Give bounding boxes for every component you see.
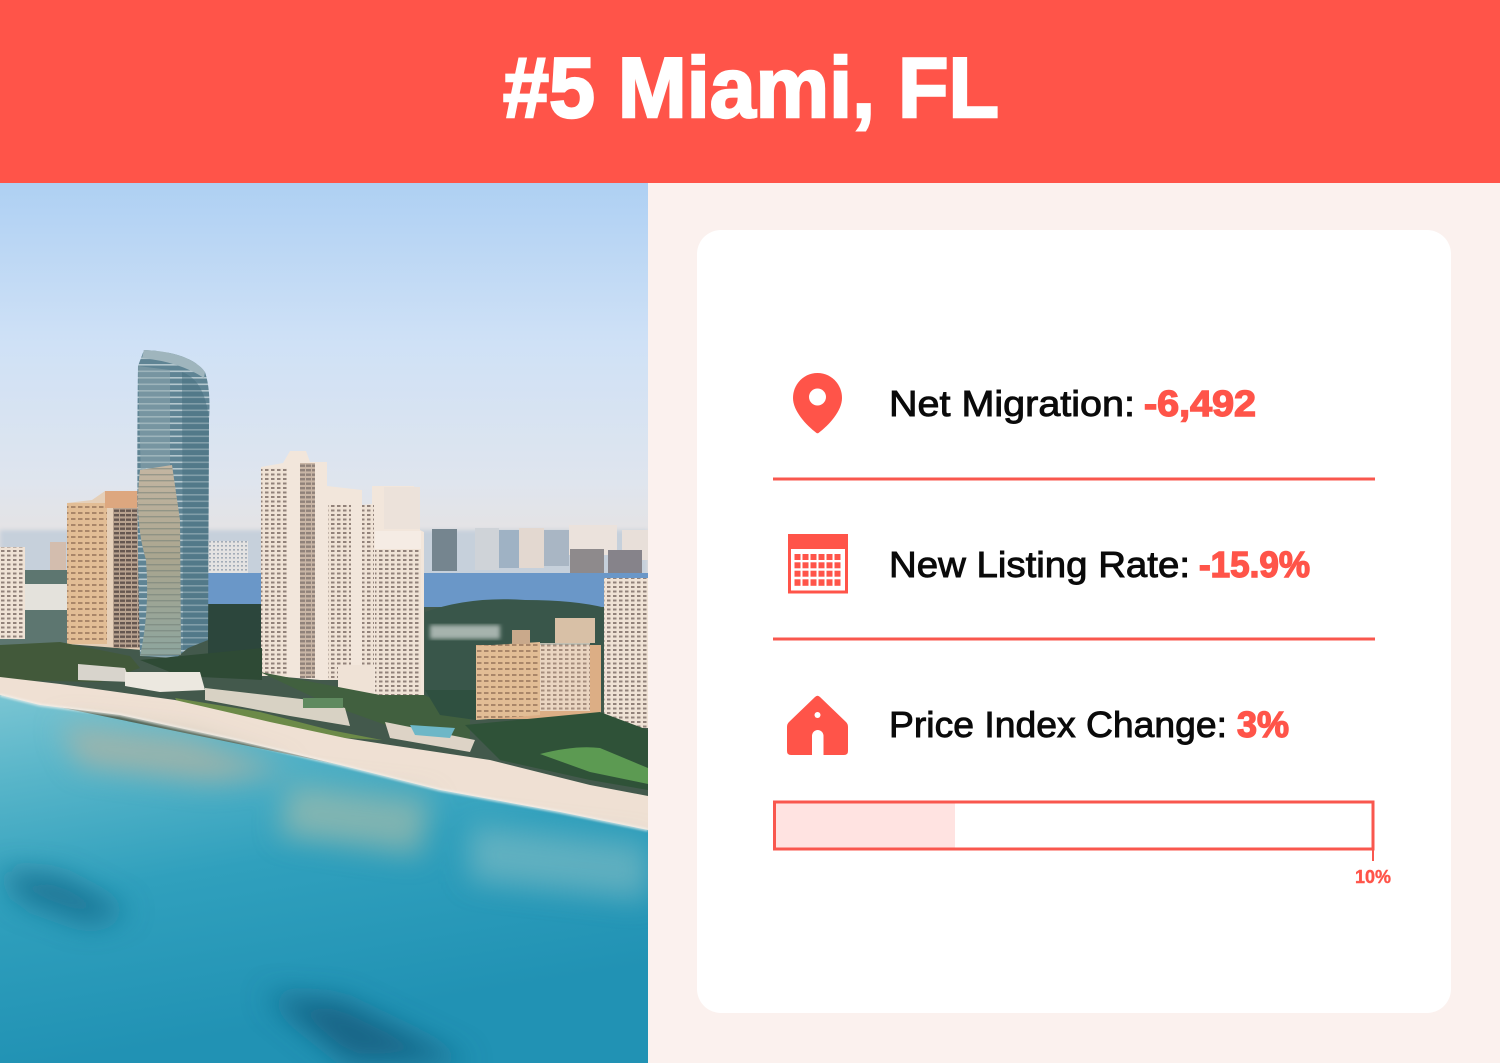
title banner <box>0 0 1500 183</box>
bay water <box>205 573 648 607</box>
land and trees behind <box>0 570 604 700</box>
icon: calendar <box>788 534 848 592</box>
stat: new listing rate: -15.9% <box>1199 544 1310 585</box>
building: tan tower <box>67 491 142 650</box>
beach hedge <box>175 698 382 740</box>
stat: price index change: Price Index Change: <box>889 704 1227 745</box>
water reflections <box>0 725 648 1063</box>
scale label: 10% <box>1355 867 1391 887</box>
distant skyline <box>0 525 648 573</box>
stat: price index change: 3% <box>1237 704 1289 745</box>
palm trees and greenery <box>0 642 648 790</box>
ground layer behind the skyline <box>0 607 648 796</box>
sea <box>0 695 648 1063</box>
building: far left tower <box>0 547 25 639</box>
icon: house <box>787 696 848 755</box>
stats card <box>697 230 1451 1013</box>
progress bar: 3% of 10% <box>774 802 1391 887</box>
surf <box>0 695 648 830</box>
low-rise beachfront buildings <box>78 664 475 752</box>
building: white tower cluster <box>261 451 424 700</box>
building: glass tower <box>137 350 210 658</box>
icon: map pin <box>793 373 842 433</box>
title: #5 Miami, FL <box>503 41 999 136</box>
stat: new listing rate <box>889 544 1310 585</box>
stat: net migration: -6,492 <box>1144 383 1256 424</box>
building: right tower <box>604 578 648 728</box>
beach <box>0 677 648 830</box>
stat: net migration: Net Migration: <box>889 383 1135 424</box>
stat: new listing rate: New Listing Rate: <box>889 544 1190 585</box>
photo: Miami beachfront skyline <box>0 183 648 1063</box>
building: orange hotel <box>476 618 601 720</box>
stat: net migration <box>889 383 1256 424</box>
